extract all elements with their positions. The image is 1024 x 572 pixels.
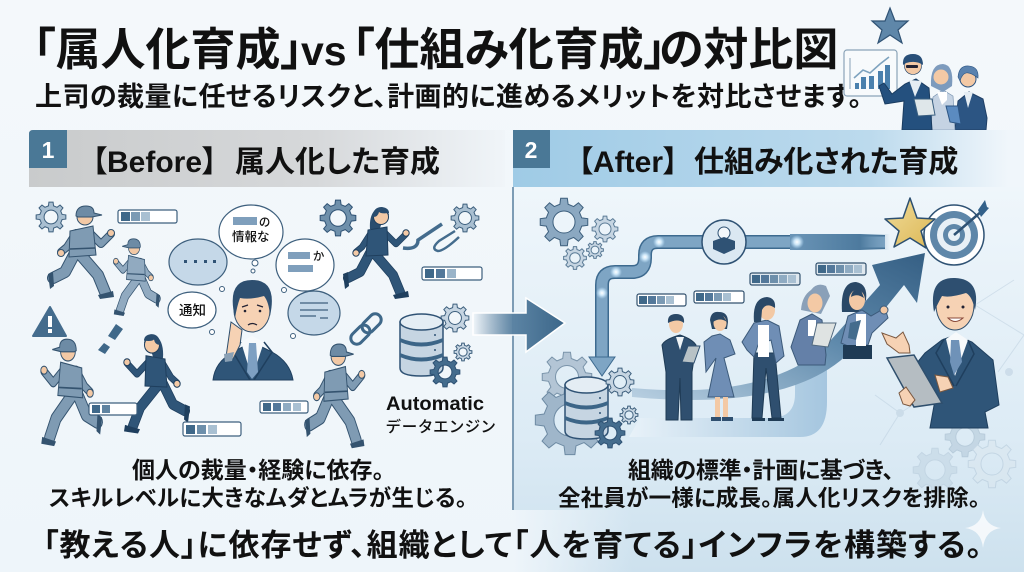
icon: gear	[620, 406, 638, 424]
conclusion: 「教える人」に依存せず、組織として「人を育てる」インフラを構築する。	[43, 528, 982, 563]
worried manager	[213, 280, 293, 380]
lower flow band	[629, 370, 827, 437]
title: の対比図	[659, 24, 838, 75]
worker running 2	[113, 239, 160, 316]
employee 1 with tablet	[662, 314, 700, 420]
label: data engine: データエンジン	[386, 417, 495, 436]
bubble: bars	[276, 239, 334, 292]
skill bar	[183, 422, 241, 436]
office worker running 2	[124, 334, 190, 434]
bubble: dots	[169, 239, 227, 292]
arrow between panels	[473, 298, 565, 352]
after panel background	[513, 187, 1024, 572]
employee 3 standing	[742, 297, 784, 421]
icon: broken gear 1	[36, 202, 66, 232]
bubble: information: 情報な	[232, 229, 269, 244]
heading: after: 【After】	[578, 146, 678, 179]
skill bar	[422, 267, 482, 280]
panel: before	[29, 130, 505, 511]
icon: knowledge circle	[702, 220, 746, 264]
growth arrow	[632, 253, 925, 400]
skill bars rising	[637, 263, 866, 306]
heading: after: 仕組み化された育成	[694, 146, 958, 179]
suit	[910, 335, 999, 428]
icon: gear	[564, 247, 586, 269]
faint background network and gears	[875, 280, 1024, 492]
star and target goal	[885, 198, 989, 265]
header illustration: team with chart	[844, 8, 987, 130]
heading: before: 【Before】	[92, 146, 217, 179]
caption: after	[558, 457, 980, 511]
icon: gear	[606, 368, 634, 396]
broken pipe	[403, 224, 442, 248]
office worker running 1	[343, 207, 409, 299]
icon: gear	[592, 216, 618, 242]
waving hand	[882, 332, 910, 353]
icon: gear	[430, 357, 460, 387]
title: vs	[301, 28, 347, 74]
header band: before	[29, 130, 505, 187]
bubble: information	[219, 205, 283, 273]
icon: gear	[451, 204, 479, 232]
icon: database	[400, 314, 443, 376]
bubble: bars: か	[313, 250, 325, 263]
hands	[899, 375, 953, 406]
employee 4 with tablet	[791, 285, 836, 365]
number badge 1	[29, 130, 67, 168]
chain	[348, 311, 384, 347]
number badge 2	[513, 130, 550, 168]
icon: gear	[595, 418, 625, 448]
icon: star	[872, 8, 908, 43]
caption: after: 組織の標準・計画に基づき、	[628, 457, 894, 483]
number badge 2: 2	[525, 137, 537, 163]
skill bar	[118, 210, 177, 223]
icon: database	[565, 377, 608, 439]
icon: target	[924, 200, 989, 265]
speech bubbles	[168, 205, 340, 338]
icon: gear	[542, 352, 592, 402]
employee 2 with skirt	[704, 312, 735, 421]
worker running 1	[48, 206, 114, 299]
face	[936, 280, 974, 330]
worker running 3	[41, 339, 102, 446]
team of three	[879, 54, 987, 130]
icon: gold star	[885, 198, 935, 248]
bubble: lines	[288, 291, 340, 338]
title: 「仕組み化育成」	[352, 24, 666, 75]
gears top left	[540, 198, 618, 269]
icon: gear large	[535, 385, 605, 455]
icon: gear	[441, 304, 469, 332]
heading: before: 属人化した育成	[235, 146, 440, 179]
caption: before	[49, 457, 467, 511]
senior presenter with tablet	[882, 278, 999, 428]
tablet	[887, 355, 942, 407]
warning triangle	[33, 307, 66, 336]
broken piece	[98, 324, 123, 354]
bubble: notice	[168, 292, 216, 334]
icon: gear	[587, 242, 603, 258]
team of employees	[662, 282, 888, 421]
skill bar	[260, 401, 308, 413]
label: automatic: Automatic	[386, 394, 484, 415]
header band: after	[513, 130, 1024, 187]
data hub	[535, 352, 638, 455]
panel divider	[512, 187, 514, 510]
subtitle: 上司の裁量に任せるリスクと、計画的に進めるメリットを対比させます。	[35, 82, 862, 112]
broken chain link	[434, 231, 459, 251]
data engine	[386, 304, 495, 436]
sparkle	[965, 510, 1001, 548]
caption: before: 個人の裁量・経験に依存。	[132, 457, 384, 483]
data pipeline	[589, 234, 890, 376]
bubble: notice: 通知	[179, 302, 206, 318]
employee 5 gesturing	[841, 282, 888, 359]
icon: broken gear 2	[320, 200, 356, 236]
icon: chart board	[844, 50, 897, 96]
bubble: information: の	[259, 217, 270, 229]
icon: gear	[540, 198, 588, 246]
caption: before: スキルレベルに大きなムダとムラが生じる。	[49, 485, 467, 511]
worker front-facing	[305, 344, 365, 448]
number badge 1: 1	[42, 137, 55, 163]
bottom strip blend	[513, 510, 633, 572]
panel: after	[473, 130, 1024, 548]
caption: after: 全社員が一様に成長。属人化リスクを排除。	[558, 485, 980, 511]
skill bar	[89, 403, 137, 415]
title: 「属人化育成」	[33, 24, 303, 75]
icon: gear	[454, 343, 472, 361]
